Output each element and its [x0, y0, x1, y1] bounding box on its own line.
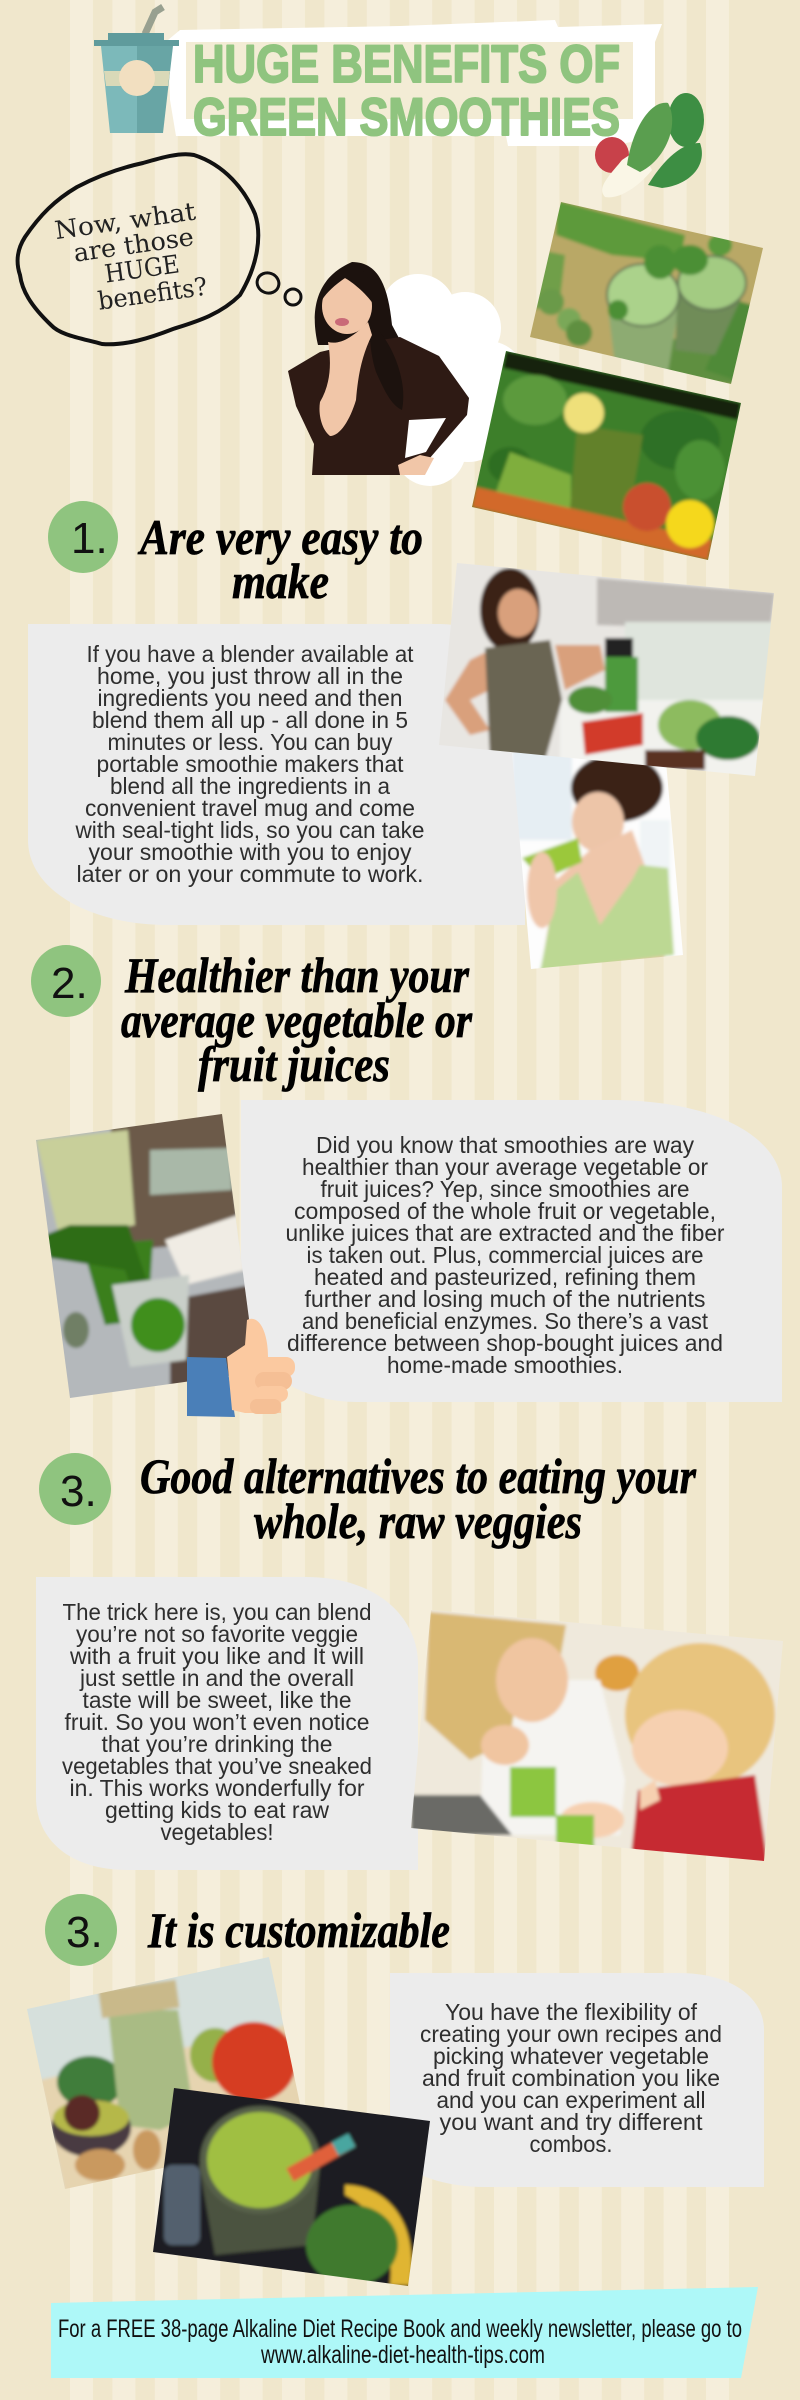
body text 3: taste will be sweet, like the: [82, 1687, 352, 1713]
title text: HUGE BENEFITS OF: [193, 35, 620, 94]
body text 3: [62, 1599, 372, 1845]
number badge 2: [31, 945, 101, 1017]
callout: newsletter banner: www.alkaline-diet-health-tips.com: [260, 2341, 545, 2369]
body text 2: heated and pasteurized, refining them: [314, 1264, 696, 1290]
heading 3: Good alternatives to eating your: [140, 1448, 696, 1504]
heading 2: Healthier than your: [124, 947, 469, 1003]
body text 1: later or on your commute to work.: [76, 861, 424, 887]
number badge 1: [48, 501, 118, 573]
body text 4: and fruit combination you like: [422, 2065, 720, 2091]
heading 2: [121, 947, 472, 1092]
icon: thumbs up: [187, 1319, 295, 1417]
photo: mother and child with smoothies: [405, 1605, 790, 1867]
heading 1: make: [232, 553, 329, 609]
icon: vegetables: [595, 93, 704, 197]
body text 2: difference between shop-bought juices and: [287, 1330, 723, 1356]
photo: two green smoothies: [530, 202, 763, 384]
photo: green juice pour: [36, 1114, 249, 1398]
body text 1: blend them all up - all done in 5: [92, 707, 408, 733]
number badge 1: 1.: [71, 514, 108, 563]
number badge 4: [45, 1894, 117, 1966]
body text 4: combos.: [530, 2131, 612, 2157]
body text 1: minutes or less. You can buy: [108, 729, 393, 755]
heading 1: Are very easy to: [137, 509, 423, 565]
bubble text: benefits?: [96, 272, 209, 316]
callout: newsletter banner: [51, 2287, 758, 2378]
body text 1: convenient travel mug and come: [85, 795, 415, 821]
heading 3: [140, 1448, 696, 1549]
panel: step 4 text: [390, 1973, 764, 2187]
body text 4: picking whatever vegetable: [433, 2043, 709, 2069]
body text 4: creating your own recipes and: [420, 2021, 722, 2047]
heading 2: average vegetable or: [121, 992, 472, 1048]
body text 3: that you’re drinking the: [102, 1731, 332, 1757]
body text 2: home-made smoothies.: [387, 1352, 623, 1378]
body text 3: The trick here is, you can blend: [62, 1599, 372, 1625]
body text 2: and beneficial enzymes. So there’s a vast: [302, 1308, 709, 1334]
number badge 2: 2.: [51, 959, 88, 1008]
body text 3: getting kids to eat raw: [105, 1797, 329, 1823]
body text 2: fruit juices? Yep, since smoothies are: [320, 1176, 690, 1202]
body text 1: home, you just throw all in the: [97, 663, 403, 689]
thought bubble: question: [18, 154, 258, 344]
body text 2: unlike juices that are extracted and the fiber: [286, 1220, 725, 1246]
heading 4: It is customizable: [147, 1902, 450, 1958]
body text 1: blend all the ingredients in a: [110, 773, 390, 799]
title banner: brush frame with heading: [168, 20, 662, 147]
body text 3: with a fruit you like and It will: [69, 1643, 364, 1669]
bubble text: are those: [72, 222, 195, 268]
number badge 3: [39, 1453, 111, 1525]
title text: GREEN SMOOTHIES: [193, 88, 620, 147]
illustration: thinking woman: [288, 262, 469, 475]
body text 1: ingredients you need and then: [98, 685, 402, 711]
body text 2: Did you know that smoothies are way: [316, 1132, 694, 1158]
body text 3: in. This works wonderfully for: [70, 1775, 365, 1801]
bubble text: Now, what: [53, 197, 197, 245]
icon: thought dots: [254, 270, 301, 305]
body text 1: with seal-tight lids, so you can take: [75, 817, 424, 843]
photo: smoothie with leafy greens: [472, 351, 741, 560]
body text 1: [75, 641, 424, 887]
body text 3: vegetables!: [160, 1819, 274, 1845]
body text 2: further and losing much of the nutrients: [304, 1286, 706, 1312]
body text 3: you’re not so favorite veggie: [76, 1621, 358, 1647]
number badge 4: 3.: [66, 1908, 103, 1957]
body text 2: is taken out. Plus, commercial juices are: [306, 1242, 704, 1268]
number badge 3: 3.: [60, 1467, 97, 1516]
photo: jar smoothie with apple and avocado: [27, 1957, 300, 2189]
bubble text: HUGE: [103, 249, 181, 289]
body text 3: fruit. So you won’t even notice: [64, 1709, 370, 1735]
heading 1: [137, 509, 423, 609]
bubble text: [53, 196, 209, 320]
body text 4: and you can experiment all: [436, 2087, 706, 2113]
photo: woman drinking smoothie: [512, 753, 683, 969]
body text 4: You have the flexibility of: [445, 1999, 698, 2025]
body text 1: If you have a blender available at: [86, 641, 414, 667]
panel: step 2 text: [241, 1100, 782, 1402]
title text: [193, 35, 620, 147]
body text 1: portable smoothie makers that: [96, 751, 404, 777]
panel: step 1 text: [28, 624, 525, 925]
body text 2: healthier than your average vegetable or: [302, 1154, 708, 1180]
icon: smoothie cup: [94, 7, 179, 133]
heading 2: fruit juices: [198, 1036, 390, 1092]
body text 2: [286, 1132, 725, 1378]
panel: step 3 text: [36, 1577, 418, 1870]
body text 2: composed of the whole fruit or vegetable,: [294, 1198, 716, 1224]
heading 3: whole, raw veggies: [254, 1493, 582, 1549]
body text 3: just settle in and the overall: [79, 1665, 354, 1691]
photo: green smoothie with straw and banana: [150, 2085, 435, 2290]
body text 4: you want and try different: [440, 2109, 703, 2135]
body text 4: [420, 1999, 722, 2157]
body text 3: vegetables that you’ve sneaked: [62, 1753, 372, 1779]
photo: woman with blender: [435, 558, 780, 783]
white cloud behind woman: [380, 274, 525, 486]
body text 1: your smoothie with you to enjoy: [88, 839, 412, 865]
